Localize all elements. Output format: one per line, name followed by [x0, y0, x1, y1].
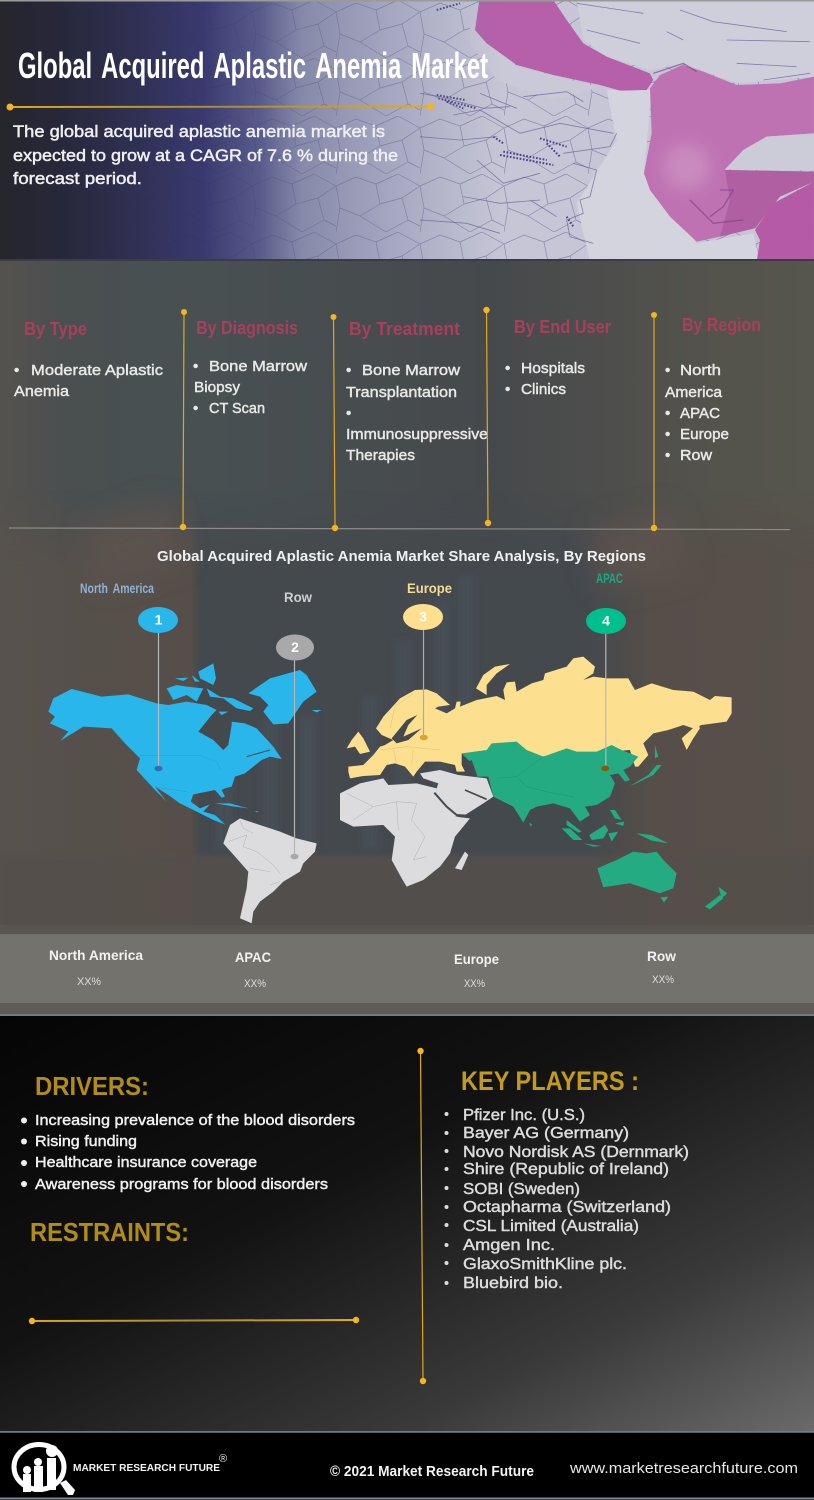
pale gap under upper tissue	[470, 20, 600, 100]
list: types: Moderate Aplastic	[31, 362, 164, 379]
list: end users: •	[505, 360, 510, 377]
list: key players: GlaxoSmithKline plc.	[463, 1256, 627, 1273]
list: types	[14, 362, 164, 400]
map region: asia pacific	[462, 742, 727, 909]
heading: by region: By Region	[682, 315, 761, 335]
list: types: Anemia	[14, 383, 70, 400]
share strip	[0, 934, 814, 1014]
share: row: Row	[647, 948, 676, 964]
label: north america: North America	[80, 580, 154, 596]
label: row: Row	[284, 589, 312, 605]
pin 2: rest of world	[276, 589, 314, 859]
list: regions: •	[665, 362, 670, 379]
footer	[0, 1431, 814, 1500]
share: europe	[454, 951, 499, 990]
list: regions: North	[680, 362, 721, 379]
pin 1: north america	[80, 580, 178, 771]
list: diagnosis: Bone Marrow	[209, 358, 307, 375]
label: apac: APAC	[596, 570, 623, 586]
heading: by end user: By End User	[514, 317, 611, 337]
share: apac: APAC	[235, 949, 271, 965]
intro paragraph: expected to grow at a CAGR of 7.6 % during the	[13, 146, 398, 165]
list: regions: Europe	[680, 426, 729, 443]
list: diagnosis: •	[193, 400, 198, 417]
list: treatments: Immunosuppressive	[346, 426, 488, 443]
share: north america: XX%	[77, 976, 101, 988]
share: europe: XX%	[464, 978, 485, 990]
lower panel	[0, 1014, 814, 1431]
share: europe: Europe	[454, 951, 499, 967]
heading: key players: KEY PLAYERS :	[461, 1066, 639, 1096]
heading: drivers: DRIVERS:	[35, 1071, 149, 1101]
pin 3: europe	[403, 580, 452, 740]
map region: south america	[223, 818, 317, 923]
column: by type	[14, 319, 164, 400]
list: key players: Octapharma (Switzerland)	[463, 1199, 671, 1216]
tissue: darker wedge	[720, 170, 814, 237]
histology tissue: upper arm	[475, 0, 653, 91]
drivers panel	[21, 1071, 355, 1193]
list: regions: APAC	[680, 405, 720, 422]
list: treatments: Bone Marrow	[362, 362, 460, 379]
key players panel	[444, 1066, 689, 1292]
list: key players: Amgen Inc.	[463, 1237, 555, 1254]
histology tissue: lower corner	[755, 182, 814, 262]
list: key players: Bayer AG (Germany)	[463, 1125, 629, 1142]
pin 1: north america: 1	[155, 612, 163, 628]
share: apac	[235, 949, 271, 990]
list: treatments: •	[346, 405, 351, 422]
share: north america	[49, 947, 143, 988]
restraints panel	[29, 1217, 359, 1324]
column: by treatment	[346, 319, 488, 464]
list: diagnosis: CT Scan	[209, 400, 265, 417]
title: Global Acquired Aplastic Anemia Market	[18, 45, 488, 86]
list: treatments: •	[346, 362, 351, 379]
share: apac: XX%	[244, 978, 266, 990]
registered mark: ®	[219, 1453, 227, 1465]
pale gap beside tissue	[577, 90, 760, 262]
column: by region	[665, 315, 761, 464]
list: drivers: Increasing prevalence of the blood disorders	[35, 1112, 355, 1129]
restraints divider	[29, 1317, 359, 1324]
list: drivers: Rising funding	[35, 1133, 137, 1150]
list: key players: Pfizer Inc. (U.S.)	[463, 1107, 585, 1124]
intro paragraph: The global acquired aplastic anemia market is	[13, 122, 385, 141]
pin 4: apac	[586, 570, 626, 771]
copyright: © 2021 Market Research Future	[330, 1463, 534, 1480]
pin 4: apac: 4	[602, 612, 610, 628]
vertical divider	[417, 1048, 426, 1384]
background panel: segments and map	[0, 261, 814, 935]
list: key players: Novo Nordisk AS (Dernmark)	[463, 1144, 689, 1161]
list: end users: Clinics	[521, 381, 566, 398]
tissue: pale core	[663, 143, 710, 190]
list: regions: •	[665, 405, 670, 422]
list: drivers: Healthcare insurance coverage	[35, 1154, 257, 1171]
icon: market research future logo	[14, 1444, 75, 1495]
intro paragraph: forecast period.	[13, 169, 142, 188]
column dividers with gold dots	[9, 307, 790, 531]
column: by end user	[505, 317, 611, 398]
list: drivers	[21, 1112, 355, 1193]
list: key players: SOBI (Sweden)	[463, 1181, 580, 1198]
list: regions: Row	[680, 447, 712, 464]
list: types: •	[14, 362, 19, 379]
heading: restraints: RESTRAINTS:	[30, 1217, 189, 1247]
marrow cell walls	[420, 3, 810, 243]
label: europe: Europe	[407, 580, 452, 596]
title divider	[6, 103, 434, 110]
share: row: XX%	[652, 974, 674, 986]
website: www.marketresearchfuture.com	[569, 1460, 798, 1477]
pin 3: europe: 3	[419, 608, 427, 624]
world map	[48, 657, 732, 923]
list: diagnosis: •	[193, 358, 198, 375]
share: north america: North America	[49, 947, 143, 963]
list: regions	[665, 362, 729, 464]
map region: africa and middle east	[340, 770, 493, 887]
list: key players: Bluebird bio.	[463, 1275, 563, 1292]
share: row	[647, 948, 676, 986]
histology tissue: main bone	[644, 65, 814, 242]
list: diagnosis: Biopsy	[194, 379, 241, 396]
pale notch	[725, 133, 814, 171]
list: diagnosis	[193, 358, 307, 417]
list: key players: CSL Limited (Australia)	[463, 1218, 639, 1235]
list: treatments: Transplantation	[346, 384, 457, 401]
map heading: Global Acquired Aplastic Anemia Market Share Analysis, By Regions	[157, 548, 646, 565]
pale area upper right	[577, 0, 814, 83]
heading: by diagnosis: By Diagnosis	[196, 318, 298, 338]
intro paragraph	[13, 122, 398, 188]
list: key players: Shire (Republic of Ireland)	[463, 1161, 669, 1178]
list: end users: •	[505, 381, 510, 398]
heading: by type: By Type	[24, 319, 87, 339]
marrow cell clusters	[437, 3, 573, 227]
list: end users: Hospitals	[521, 360, 585, 377]
list: regions: America	[665, 384, 723, 401]
brand name: MARKET RESEARCH FUTURE	[73, 1463, 220, 1474]
list: treatments	[346, 362, 488, 464]
pin 2: rest of world: 2	[291, 639, 299, 655]
list: regions: •	[665, 426, 670, 443]
list: treatments: Therapies	[346, 447, 415, 464]
hero banner	[0, 0, 814, 262]
tissue veins	[653, 63, 743, 223]
list: regions: •	[665, 447, 670, 464]
heading: by treatment: By Treatment	[349, 319, 460, 339]
list: key players	[444, 1107, 689, 1292]
map region: north america	[48, 663, 322, 824]
map region: europe and russia	[347, 657, 732, 778]
column: by diagnosis	[193, 318, 307, 417]
list: end users	[505, 360, 585, 398]
list: drivers: Awareness programs for blood disorders	[35, 1176, 328, 1193]
